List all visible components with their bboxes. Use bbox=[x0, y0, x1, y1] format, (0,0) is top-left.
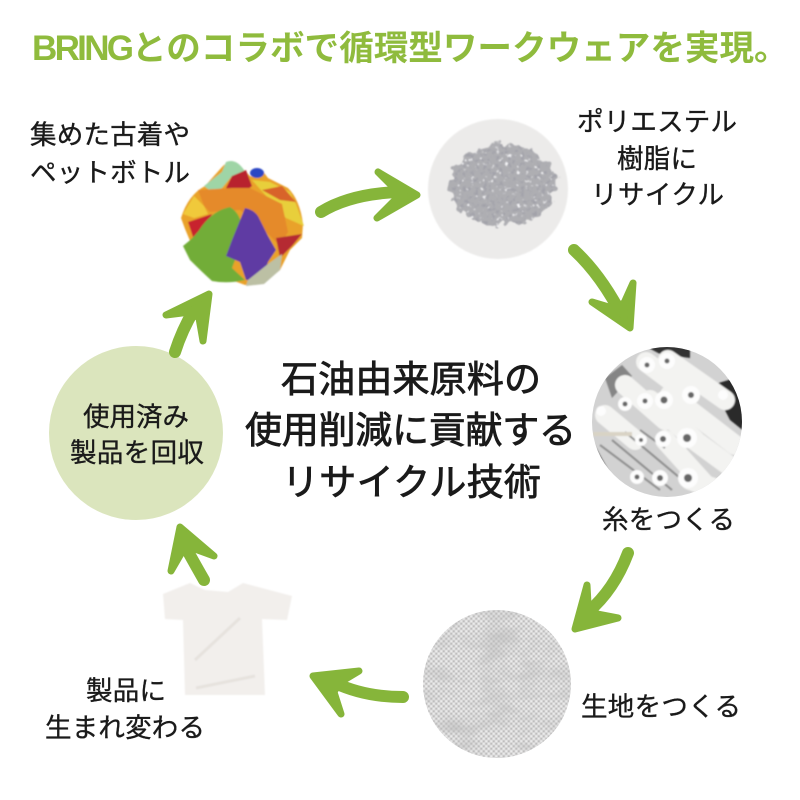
arrow: collection to clothes bbox=[166, 294, 209, 352]
arrow: product to collection bbox=[171, 527, 214, 580]
icon: ball of used clothes bbox=[181, 161, 304, 286]
collection circle bbox=[49, 346, 223, 520]
step 2 label: recycled into polyester resin: リサイクル bbox=[591, 180, 724, 210]
step 5 label: reborn as a product: 製品に bbox=[86, 676, 166, 706]
title: とのコラボで循環型ワークウェアを実現。 bbox=[132, 30, 789, 68]
center message bbox=[245, 359, 576, 503]
icon: polyester pellets on a dish bbox=[428, 119, 568, 259]
arrow: clothes to resin bbox=[321, 172, 417, 218]
title: BRING bbox=[32, 29, 134, 68]
step 2 label: recycled into polyester resin: ポリエステル bbox=[577, 107, 737, 137]
step 4 label: make fabric: 生地をつくる bbox=[581, 692, 741, 722]
icon: white t-shirt bbox=[163, 583, 292, 695]
collection circle: 製品を回収 bbox=[70, 438, 204, 468]
step 1 label: collected clothes and bottles bbox=[30, 120, 190, 188]
step 3 label: make yarn: 糸をつくる bbox=[602, 505, 735, 535]
icon: yarn spools bbox=[590, 345, 745, 500]
step 1 label: collected clothes and bottles: 集めた古着や bbox=[30, 120, 190, 150]
step 2 label: recycled into polyester resin: 樹脂に bbox=[617, 144, 697, 174]
center message: 石油由来原料の bbox=[281, 359, 541, 400]
center message: 使用削減に貢献する bbox=[245, 410, 576, 451]
collection circle: 使用済み bbox=[83, 402, 189, 432]
step 1 label: collected clothes and bottles: ペットボトル bbox=[30, 158, 190, 188]
center message: リサイクル技術 bbox=[282, 462, 541, 503]
arrow: fabric to product bbox=[313, 671, 403, 714]
icon: knit fabric bbox=[420, 608, 575, 763]
step 5 label: reborn as a product: 生まれ変わる bbox=[45, 713, 205, 743]
step 2 label: recycled into polyester resin bbox=[577, 107, 737, 210]
step 5 label: reborn as a product bbox=[45, 676, 205, 743]
arrow: yarn to fabric bbox=[575, 553, 628, 629]
arrow: resin to yarn bbox=[574, 250, 633, 328]
